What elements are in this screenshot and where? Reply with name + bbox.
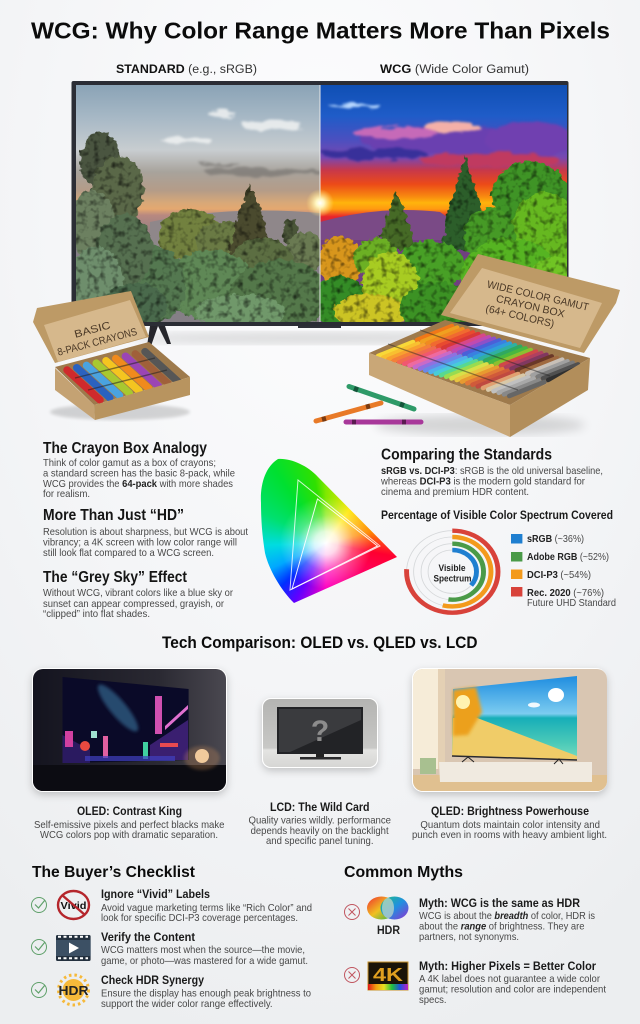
checklist item: HDR synergy: support the wider color range effectively. bbox=[101, 999, 273, 1010]
caption: LCD: LCD: The Wild Card bbox=[270, 800, 370, 814]
caption: OLED bbox=[34, 804, 225, 841]
section heading: tech comparison: Tech Comparison: OLED vs. QLED vs. LCD bbox=[162, 633, 478, 652]
caption: LCD: depends heavily on the backlight bbox=[251, 826, 389, 837]
text: crayon box analogy bbox=[43, 440, 235, 500]
checklist item: ignore vivid: look for specific DCI-P3 coverage percentages. bbox=[101, 913, 298, 924]
myth: higher pixels: gamut; resolution and color are independent bbox=[419, 984, 606, 996]
text: crayon box analogy: for realism. bbox=[43, 489, 90, 500]
text: comparing the standards: cinema and premium HDR content. bbox=[381, 487, 529, 498]
text: grey sky effect: “clipped” into flat shades. bbox=[43, 609, 150, 620]
myth: WCG same as HDR: about the range of brightness. They are bbox=[419, 922, 585, 932]
checklist item: HDR synergy bbox=[32, 973, 311, 1010]
caption: QLED: punch even in rooms with heavy ambient light. bbox=[412, 830, 607, 841]
box label bbox=[480, 279, 590, 337]
myth: higher pixels bbox=[344, 959, 606, 1006]
wide color gamut crayon box bbox=[369, 254, 620, 437]
overlapping circles HDR icon: HDR bbox=[377, 925, 401, 937]
checklist item: verify content: game, or photo—was mastered for a wide gamut. bbox=[101, 956, 308, 967]
checklist item: verify content bbox=[32, 930, 308, 967]
heading: buyer's checklist: The Buyer’s Checklist bbox=[32, 864, 196, 881]
text: comparing the standards: whereas DCI-P3 is the modern gold standard for bbox=[380, 476, 585, 488]
label: standard side: STANDARD (e.g., sRGB) bbox=[116, 64, 257, 76]
text: grey sky effect: sunset can appear compressed, grayish, or bbox=[43, 599, 224, 610]
chart legend: Adobe RGB (~52%) bbox=[527, 552, 609, 563]
TV left half: standard colors bbox=[76, 85, 320, 322]
text: crayon box analogy: WCG provides the 64-pack with more shades bbox=[43, 479, 233, 490]
chart legend: Rec. 2020 (~76%) bbox=[527, 588, 604, 599]
text: comparing the standards: Comparing the Standards bbox=[381, 446, 552, 464]
myth: higher pixels: specs. bbox=[419, 995, 446, 1006]
radial bar chart: Visible bbox=[438, 563, 466, 574]
caption: OLED: WCG colors pop with dramatic separation. bbox=[40, 830, 218, 841]
title: WCG: Why Color Range Matters More Than Pixels bbox=[31, 18, 610, 44]
myth: WCG same as HDR: WCG is about the breadth of color, HDR is bbox=[419, 911, 595, 922]
chart legend: sRGB (~36%) bbox=[527, 534, 584, 545]
text: more than just HD bbox=[43, 507, 248, 559]
checklist item: HDR synergy: Ensure the display has enough peak brightness to bbox=[101, 988, 311, 1000]
card image: LCD bbox=[262, 698, 378, 768]
chart heading: Percentage of Visible Color Spectrum Covered bbox=[381, 508, 613, 522]
myth: WCG same as HDR: partners, not synonyms. bbox=[419, 932, 519, 943]
text: comparing the standards bbox=[380, 446, 603, 498]
checklist item: verify content: Verify the Content bbox=[101, 930, 195, 944]
heading: common myths: Common Myths bbox=[344, 864, 463, 881]
check icon bbox=[32, 982, 46, 998]
question mark: ? bbox=[311, 715, 329, 748]
no-vivid icon: Vivid bbox=[60, 900, 86, 912]
myth: WCG same as HDR bbox=[344, 896, 595, 943]
chart legend bbox=[511, 534, 616, 609]
no-vivid icon bbox=[58, 891, 89, 919]
caption: LCD bbox=[248, 800, 391, 847]
caption: OLED: OLED: Contrast King bbox=[77, 804, 182, 818]
caption: QLED bbox=[412, 804, 607, 841]
checklist item: ignore vivid bbox=[32, 887, 312, 924]
4K rainbow icon bbox=[368, 962, 408, 990]
TV comparison bbox=[67, 81, 585, 346]
caption: LCD: and specific panel tuning. bbox=[266, 836, 374, 847]
cross icon bbox=[344, 904, 360, 920]
caption: LCD: Quality varies wildly. performance bbox=[248, 816, 391, 826]
myth: WCG same as HDR: Myth: WCG is the same as HDR bbox=[419, 896, 580, 910]
text: more than just HD: Resolution is about sharpness, but WCG is about bbox=[43, 527, 248, 538]
label: WCG side: WCG (Wide Color Gamut) bbox=[380, 64, 529, 76]
check icon bbox=[32, 940, 46, 954]
checklist item: ignore vivid: Ignore “Vivid” Labels bbox=[101, 887, 210, 901]
myth: higher pixels: A 4K label does not guarantee a wide color bbox=[419, 974, 600, 985]
text: comparing the standards: sRGB vs. DCI-P3: sRGB is the old universal baseline, bbox=[381, 466, 603, 477]
text: grey sky effect bbox=[43, 569, 233, 620]
box label: BASIC bbox=[73, 319, 112, 341]
text: grey sky effect: Without WCG, vibrant colors like a blue sky or bbox=[43, 588, 233, 599]
text: more than just HD: still look flat compared to a WCG screen. bbox=[43, 548, 214, 559]
HDR sun icon bbox=[58, 975, 89, 1005]
TV right half: wide color gamut bbox=[320, 85, 567, 322]
caption: OLED: Self-emissive pixels and perfect blacks make bbox=[34, 820, 225, 831]
chromaticity gamut diagram bbox=[260, 458, 397, 603]
radial bar chart bbox=[407, 531, 498, 613]
myth: higher pixels: Myth: Higher Pixels = Better Color bbox=[419, 959, 596, 973]
film icon bbox=[56, 935, 91, 961]
box label: CRAYON BOX bbox=[495, 293, 566, 320]
overlapping circles HDR icon bbox=[367, 896, 408, 937]
card image: OLED bbox=[32, 668, 227, 792]
4K rainbow icon: 4K bbox=[373, 965, 403, 985]
checklist item: verify content: WCG matters most when the source—the movie, bbox=[101, 945, 305, 956]
loose crayons bbox=[316, 386, 421, 422]
caption: QLED: QLED: Brightness Powerhouse bbox=[431, 804, 589, 818]
card image: QLED bbox=[412, 668, 607, 792]
box label: (64+ COLORS) bbox=[484, 303, 555, 330]
chart legend: DCI-P3 (~54%) bbox=[527, 570, 591, 581]
text: more than just HD: vibrancy; a 4K screen with low color range will bbox=[43, 538, 237, 548]
text: more than just HD: More Than Just “HD” bbox=[43, 507, 184, 524]
box label: WIDE COLOR GAMUT bbox=[486, 279, 590, 314]
check icon bbox=[32, 898, 46, 912]
text: crayon box analogy: The Crayon Box Analogy bbox=[43, 440, 207, 457]
box label bbox=[53, 313, 138, 359]
box label: 8-PACK CRAYONS bbox=[56, 326, 138, 359]
text: grey sky effect: The “Grey Sky” Effect bbox=[43, 569, 187, 586]
checklist item: ignore vivid: Avoid vague marketing terms like “Rich Color” and bbox=[101, 903, 312, 914]
chart legend: Future UHD Standard bbox=[527, 598, 616, 609]
basic 8-pack crayon box bbox=[33, 291, 190, 420]
checklist item: HDR synergy: Check HDR Synergy bbox=[101, 973, 204, 987]
text: crayon box analogy: Think of color gamut as a box of crayons; bbox=[43, 458, 216, 469]
HDR sun icon: HDR bbox=[58, 983, 89, 998]
text: crayon box analogy: a standard screen has the basic 8-pack, while bbox=[43, 468, 235, 480]
cross icon bbox=[344, 968, 360, 982]
radial bar chart: Spectrum bbox=[434, 574, 472, 584]
caption: QLED: Quantum dots maintain color intensity and bbox=[420, 820, 600, 831]
